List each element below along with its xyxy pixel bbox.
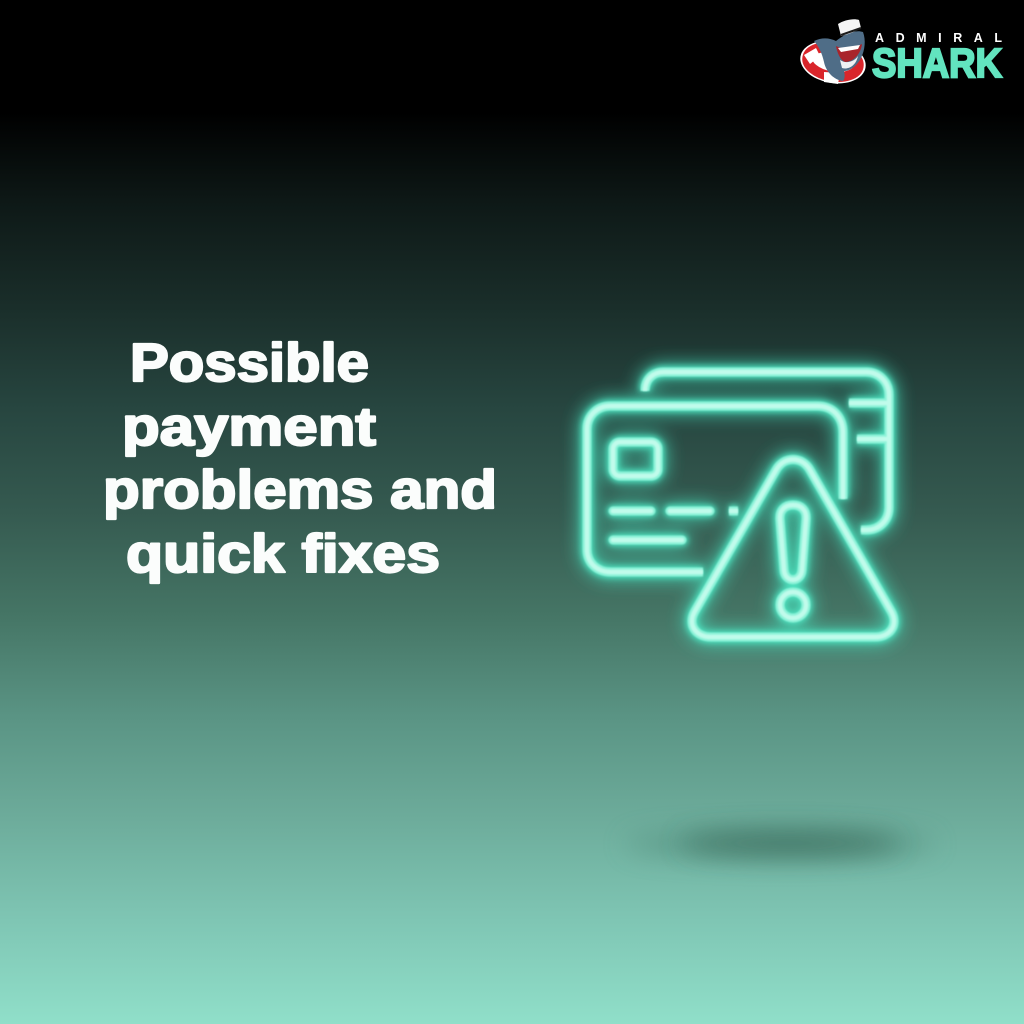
- logo wordmark: ADMIRAL: ADMIRAL: [875, 31, 1002, 45]
- title line 2: payment: [122, 397, 376, 457]
- floating shadow under icon: [625, 830, 935, 858]
- logo: Admiral Shark: [797, 19, 1002, 88]
- title: [103, 333, 497, 584]
- title line 4: quick fixes: [126, 524, 440, 584]
- icon: neon credit cards with warning triangle: [587, 372, 894, 637]
- title line 1: Possible: [130, 333, 369, 393]
- logo wordmark: SHARK: SHARK: [872, 40, 1002, 86]
- title line 3: problems and: [103, 460, 497, 520]
- icon: shark with life ring: [797, 19, 869, 88]
